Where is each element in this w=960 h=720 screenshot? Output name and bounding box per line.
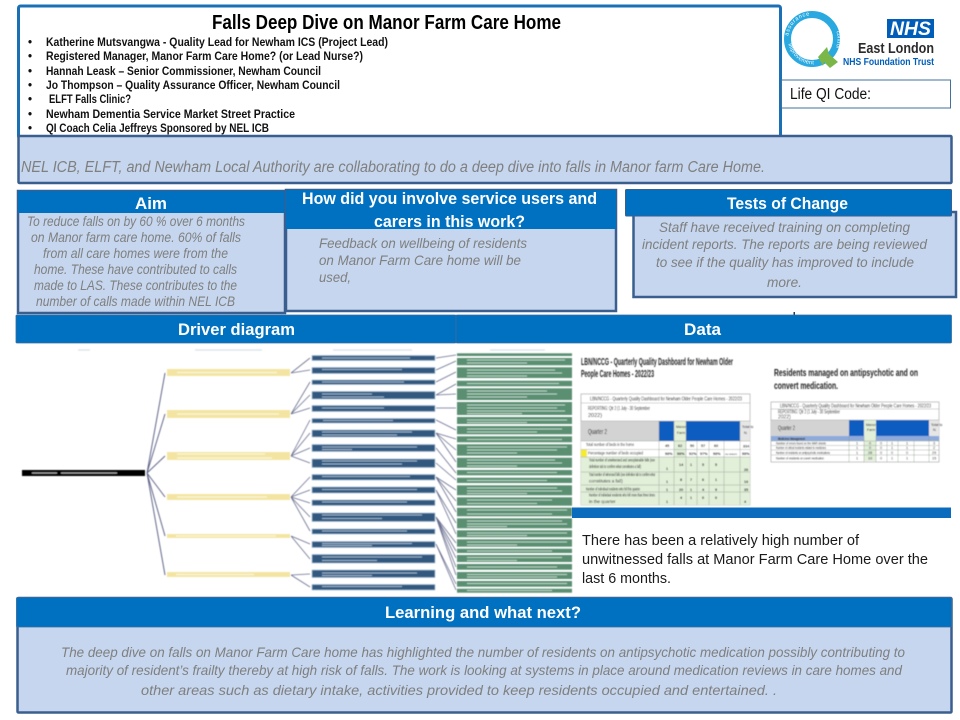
aim heading: Aim xyxy=(135,194,167,213)
dashboard table: Total number of witnessed falls (see definition tab to confirm what xyxy=(589,472,655,477)
team list: ELFT Falls Clinic? xyxy=(49,94,131,106)
dashboard table: 57 xyxy=(701,444,705,448)
dashboard heading: LBN/NCCG - Quarterly Quality Dashboard for Newham Older xyxy=(581,357,733,368)
tests of change text: Staff have received training on completing xyxy=(659,219,910,235)
heading: data: Data xyxy=(684,320,722,339)
dashboard table: Total number of beds in the home xyxy=(586,442,634,447)
panel: learning and what next xyxy=(16,598,952,712)
medication table: 0 xyxy=(880,456,882,460)
medication table: 29 xyxy=(932,451,936,455)
medication table: 10 xyxy=(868,456,872,460)
aim text: from all care homes were from the xyxy=(43,245,228,261)
medication table: 0 xyxy=(880,446,882,450)
dashboard table: 62 xyxy=(678,444,682,448)
medication table: Number of residents on antipsychotic medications xyxy=(776,451,830,455)
learning text xyxy=(61,644,905,698)
service users heading: How did you involve service users and xyxy=(302,189,597,208)
dashboard table xyxy=(581,394,753,505)
medication table: 1 xyxy=(906,442,908,446)
dashboard table: 4 xyxy=(744,500,747,504)
dashboard table: 16 xyxy=(744,480,748,484)
team list: • xyxy=(28,66,32,78)
connectors: aim to primary drivers xyxy=(147,373,165,575)
service users heading xyxy=(286,189,616,231)
medication table: 0 xyxy=(891,451,893,455)
dashboard table: in the quarter xyxy=(589,499,616,504)
service users text: used, xyxy=(319,269,351,285)
team list: Hannah Leask – Senior Commissioner, Newham Council xyxy=(46,66,321,78)
medication table: 2022) xyxy=(778,414,791,420)
dashboard table: 2022) xyxy=(588,413,602,419)
icon: assurance logo: assurance xyxy=(786,12,809,36)
aim text: number of calls made within NEL ICB xyxy=(36,293,235,309)
medication table: Quarter 2 xyxy=(778,425,795,432)
medication table: 1 xyxy=(856,451,858,455)
team list: • xyxy=(28,109,32,121)
service users text: on Manor Farm Care home will be xyxy=(319,252,521,268)
panel: service users and carers xyxy=(286,189,616,311)
dashboard table: 5 xyxy=(715,463,717,467)
medication table: 0 xyxy=(906,451,908,455)
heading: driver diagram: Driver diagram xyxy=(178,320,295,339)
medication table heading xyxy=(774,367,918,392)
dashboard heading: People Care Homes - 2022/23 xyxy=(581,369,654,380)
medication table: 1 xyxy=(906,456,908,460)
medication table: 1 xyxy=(906,446,908,450)
medication table: Number of residents on covert medication xyxy=(776,456,824,460)
learning text: The deep dive on falls on Manor Farm Care home has highlighted the number of residents on antipsychotic medication possibly contributing to xyxy=(61,644,905,660)
dashboard table: 20 xyxy=(679,488,683,492)
dashboard table: 6 xyxy=(702,478,704,482)
dashboard table: 98% xyxy=(677,452,685,456)
aim heading xyxy=(18,191,285,213)
aim text: To reduce falls on by 60 % over 6 months xyxy=(27,213,245,229)
medication table: 0 xyxy=(869,442,871,446)
secondary drivers xyxy=(312,356,435,590)
tests of change text: more. xyxy=(767,274,802,290)
logo: NHS East London: East London xyxy=(858,41,934,57)
team list: QI Coach Celia Jeffreys Sponsored by NEL ICB xyxy=(46,123,269,135)
panel: summary: NEL ICB, ELFT, and Newham Local Authority are collaborating to do a deep dive into falls in Manor farm Care Home. xyxy=(21,159,765,176)
dashboard table: 1 xyxy=(666,488,668,492)
dashboard heading xyxy=(581,357,733,380)
change ideas xyxy=(457,353,572,593)
icon: assurance logo xyxy=(784,11,840,68)
medication table: N. xyxy=(933,428,937,432)
dashboard table: 50 xyxy=(690,444,694,448)
medication table: 1 xyxy=(856,456,858,460)
dashboard table: LBN/NCCG - Quarterly Quality Dashboard for Newham Older People Care Homes - 2022/23 xyxy=(590,396,742,402)
dashboard table: Farm xyxy=(677,431,685,435)
dashboard table: 60 xyxy=(714,444,718,448)
medication table: 3 xyxy=(933,442,935,446)
panel: title and team xyxy=(18,6,780,138)
medication table: 1 xyxy=(891,446,893,450)
team list xyxy=(28,37,388,135)
driver diagram xyxy=(22,350,572,593)
dashboard table: no return xyxy=(725,452,737,456)
title: Falls Deep Dive on Manor Farm Care Home xyxy=(212,12,561,34)
dashboard table: 45 xyxy=(665,444,669,448)
dashboard table: 4 xyxy=(680,496,683,500)
dashboard table: 14 xyxy=(679,463,684,467)
dashboard table: 8 xyxy=(680,478,682,482)
tests of change heading xyxy=(626,190,952,216)
service users text xyxy=(319,235,527,285)
aim text: home. These have contributed to calls xyxy=(34,261,237,277)
icon: assurance logo: improvement xyxy=(788,44,814,64)
team list: Newham Dementia Service Market Street Practice xyxy=(46,109,295,121)
dashboard table: 1 xyxy=(690,463,692,467)
service users heading: carers in this work? xyxy=(374,212,525,231)
data panel bottom bar xyxy=(572,508,951,518)
medication table: 1 xyxy=(891,442,893,446)
medication table: Number of errors found on the MAR sheets xyxy=(776,442,826,446)
chart: antipsychotic medication table xyxy=(771,367,942,462)
dashboard table: 98% xyxy=(713,452,721,456)
dashboard table: definition tab to confirm what constitutes a fall) xyxy=(589,464,641,469)
medication table: 1 xyxy=(856,442,858,446)
team list: • xyxy=(28,37,32,49)
tests of change text xyxy=(642,219,928,290)
dashboard table: 1 xyxy=(666,500,668,504)
medication table: 26 xyxy=(868,451,872,455)
panel: aim xyxy=(18,191,285,313)
dashboard table: 1 xyxy=(690,488,692,492)
medication table: 0 xyxy=(869,446,871,450)
dashboard table: Quarter 2 xyxy=(588,429,607,436)
dashboard table: 1 xyxy=(715,478,717,482)
dashboard table: 7 xyxy=(690,478,692,482)
chart: quarterly quality dashboard xyxy=(581,357,753,505)
dashboard table: 1 xyxy=(666,467,668,471)
team list: Katherine Mutsvangwa - Quality Lead for Newham ICS (Project Lead) xyxy=(46,37,388,49)
connectors: primary to secondary drivers xyxy=(291,358,310,587)
dashboard table: 26 xyxy=(744,468,748,472)
learning heading: Learning and what next? xyxy=(385,603,581,622)
medication table: 0 xyxy=(880,451,882,455)
dashboard table: 98% xyxy=(665,452,673,456)
dashboard table: Total to xyxy=(742,425,753,429)
Life QI code box xyxy=(782,80,950,108)
panel: summary xyxy=(18,136,952,183)
dashboard table: N. xyxy=(744,431,748,435)
medication table: Total to xyxy=(931,423,942,427)
tests of change text: to see if the quality has improved to include xyxy=(656,254,914,270)
dashboard table: 1 xyxy=(666,480,668,484)
medication table: Farm xyxy=(867,428,875,432)
logo: NHS East London xyxy=(843,19,934,68)
data commentary: last 6 months. xyxy=(582,570,671,587)
medication table: Manor xyxy=(866,423,877,427)
data commentary: There has been a relatively high number of xyxy=(582,532,860,549)
team list: • xyxy=(28,80,32,92)
dashboard table: 5 xyxy=(702,463,704,467)
dashboard table: constitutes a fall) xyxy=(589,478,623,484)
medication table: REPORTING: Qtr 2 (1 July - 30 September xyxy=(778,410,840,416)
dashboard table: 334 xyxy=(743,444,750,448)
heading: data xyxy=(456,315,952,343)
data commentary: unwitnessed falls at Manor Farm Care Home over the xyxy=(582,551,928,568)
tests of change text: incident reports. The reports are being reviewed xyxy=(642,236,928,252)
medication table: 0 xyxy=(880,442,882,446)
tests of change heading: Tests of Change xyxy=(727,194,848,213)
dashboard table: 98% xyxy=(742,452,750,456)
learning heading xyxy=(16,598,952,627)
team list: • xyxy=(28,123,32,135)
aim text xyxy=(27,213,245,309)
service users text: Feedback on wellbeing of residents xyxy=(319,235,527,251)
logo: NHS East London: NHS Foundation Trust xyxy=(843,56,934,68)
learning text: majority of resident’s frailty thereby at high risk of falls. The work is looking at systems in place around medication reviews in care homes and xyxy=(66,662,903,678)
aim text: on Manor farm care home. 60% of falls xyxy=(31,229,241,245)
dashboard table: Number of individual residents who fell this quarter xyxy=(586,486,640,492)
dashboard table: 97% xyxy=(700,452,708,456)
primary drivers xyxy=(167,369,290,577)
connectors: secondary drivers to change ideas xyxy=(436,355,456,590)
medication table: Number of critical incidents related to medicines xyxy=(776,446,826,450)
dashboard table: 9 xyxy=(715,488,717,492)
icon: assurance logo: control xyxy=(836,31,840,48)
team list: Registered Manager, Manor Farm Care Home? (or Lead Nurse?) xyxy=(46,51,363,63)
medication table: Medicines Management xyxy=(778,437,805,441)
dashboard table: REPORTING: Qtr 2 (1 July - 30 September xyxy=(588,406,650,412)
aim text: made to LAS. These contributes to the xyxy=(34,277,237,293)
panel: tests of change xyxy=(626,190,956,297)
data commentary xyxy=(582,532,928,587)
dashboard table: 1 xyxy=(690,496,692,500)
dashboard table: Manor xyxy=(676,425,687,429)
medication table: 1 xyxy=(856,446,858,450)
dashboard table: 35 xyxy=(744,488,748,492)
dashboard table: 0 xyxy=(702,496,704,500)
team list: • xyxy=(28,94,32,106)
dashboard table: Percentage number of beds occupied xyxy=(588,450,643,456)
dashboard table: Number of individual residents who fell more than three times xyxy=(589,492,655,498)
logo: NHS East London: NHS xyxy=(890,19,931,40)
Life QI code box: Life QI Code: xyxy=(790,86,871,103)
medication table heading: convert medication. xyxy=(774,380,838,392)
medication table xyxy=(771,402,942,462)
dashboard table: 4 xyxy=(702,488,705,492)
medication table: 1 xyxy=(891,456,893,460)
dashboard table: Total number of unwitnessed and unexplainable falls (see xyxy=(589,458,655,462)
team list: • xyxy=(28,51,32,63)
learning text: other areas such as dietary intake, activities provided to keep residents occupied and entertained. . xyxy=(141,682,777,698)
aim bar xyxy=(22,470,145,476)
heading: driver diagram xyxy=(16,315,456,343)
medication table: 2 xyxy=(933,446,935,450)
dashboard table: 92% xyxy=(689,452,697,456)
medication table: 15 xyxy=(932,456,936,460)
team list: Jo Thompson – Quality Assurance Officer, Newham Council xyxy=(46,80,340,92)
dashboard table: 0 xyxy=(715,496,717,500)
